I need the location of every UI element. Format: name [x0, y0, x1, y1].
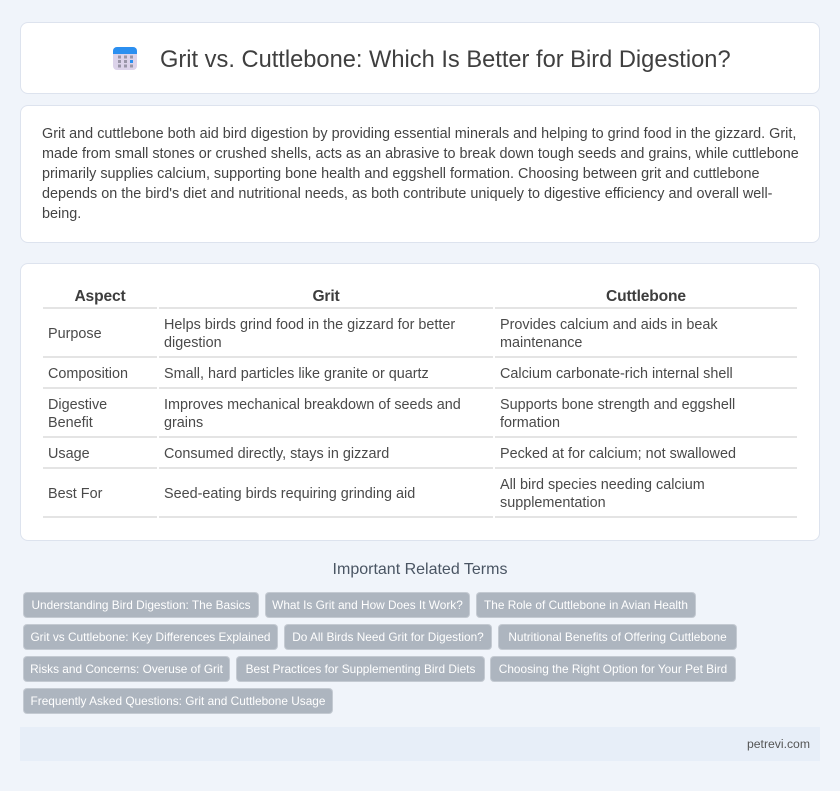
intro text: primarily supplies calcium, supporting bone health and eggshell formation. Choosing between grit and cuttlebone	[42, 166, 760, 182]
Best For: Grit: Seed-eating birds requiring grinding aid	[164, 486, 415, 502]
row: Usage: Usage	[48, 446, 90, 462]
panel: introduction	[20, 105, 820, 243]
tag: What Is Grit and How Does It Work?	[272, 598, 463, 612]
intro text	[42, 126, 799, 222]
row: Digestive Benefit: Digestive	[48, 397, 107, 413]
panel: comparison table	[20, 263, 820, 541]
Digestive Benefit: Grit: grains	[164, 415, 203, 431]
row: Composition: Composition	[48, 366, 128, 382]
tag: Understanding Bird Digestion: The Basics	[31, 598, 250, 612]
tag	[24, 689, 332, 713]
intro text: Grit and cuttlebone both aid bird digestion by providing essential minerals and helping to grind food in the gizzard. Grit,	[42, 126, 796, 142]
Purpose: Cuttlebone	[500, 317, 718, 351]
tag	[477, 593, 695, 617]
row: Digestive Benefit: Benefit	[48, 415, 93, 431]
related terms tags	[23, 592, 737, 714]
Digestive Benefit: Cuttlebone: formation	[500, 415, 560, 431]
row: Digestive Benefit	[48, 397, 107, 431]
Purpose: Grit: digestion	[164, 335, 222, 351]
row: Best For: Best For	[48, 486, 102, 502]
Best For: Cuttlebone: supplementation	[500, 495, 606, 511]
heading: related terms: Important Related Terms	[333, 561, 507, 578]
Digestive Benefit: Cuttlebone	[500, 397, 735, 431]
table header: Aspect: Aspect	[74, 288, 126, 305]
Composition: Cuttlebone: Calcium carbonate-rich internal shell	[500, 366, 733, 382]
tag	[24, 593, 258, 617]
tag: Best Practices for Supplementing Bird Diets	[246, 662, 475, 676]
tag	[499, 625, 736, 649]
tag: Frequently Asked Questions: Grit and Cuttlebone Usage	[31, 694, 325, 708]
Purpose: Cuttlebone: Provides calcium and aids in beak	[500, 317, 718, 333]
Composition: Grit: Small, hard particles like granite or quartz	[164, 366, 429, 382]
Purpose: Grit: Helps birds grind food in the gizzard for better	[164, 317, 455, 333]
Digestive Benefit: Grit	[164, 397, 461, 431]
tag: Choosing the Right Option for Your Pet Bird	[499, 662, 727, 676]
row: Purpose: Purpose	[48, 326, 102, 342]
tag	[491, 657, 735, 681]
Best For: Cuttlebone: All bird species needing calcium	[500, 477, 705, 493]
header panel	[20, 22, 820, 94]
tag	[285, 625, 491, 649]
Usage: Cuttlebone: Pecked at for calcium; not swallowed	[500, 446, 736, 462]
tag: The Role of Cuttlebone in Avian Health	[484, 598, 688, 612]
title: Grit vs. Cuttlebone: Which Is Better for Bird Digestion?	[160, 47, 731, 73]
Digestive Benefit: Grit: Improves mechanical breakdown of seeds and	[164, 397, 461, 413]
intro text: made from small stones or crushed shells, acts as an abrasive to break down tough seeds and grains, while cuttlebone	[42, 146, 799, 162]
tag	[24, 657, 229, 681]
tag: Grit vs Cuttlebone: Key Differences Explained	[30, 630, 271, 644]
Usage: Grit: Consumed directly, stays in gizzard	[164, 446, 389, 462]
Purpose: Grit	[164, 317, 455, 351]
icon: calendar	[113, 47, 137, 70]
footer bar	[20, 727, 820, 761]
Best For: Cuttlebone	[500, 477, 705, 511]
Purpose: Cuttlebone: maintenance	[500, 335, 582, 351]
table header: Grit: Grit	[312, 288, 340, 305]
intro text: depends on the bird's diet and nutritional needs, as both contribute uniquely to digestive efficiency and overall well-	[42, 186, 772, 202]
intro text: being.	[42, 206, 81, 222]
Digestive Benefit: Cuttlebone: Supports bone strength and eggshell	[500, 397, 735, 413]
footer text: petrevi.com: petrevi.com	[747, 737, 810, 751]
tag: Risks and Concerns: Overuse of Grit	[30, 662, 223, 676]
tag	[266, 593, 469, 617]
tag: Do All Birds Need Grit for Digestion?	[292, 630, 484, 644]
tag: Nutritional Benefits of Offering Cuttlebone	[508, 630, 727, 644]
tag	[24, 625, 277, 649]
tag	[237, 657, 484, 681]
table header: Cuttlebone: Cuttlebone	[606, 288, 686, 305]
